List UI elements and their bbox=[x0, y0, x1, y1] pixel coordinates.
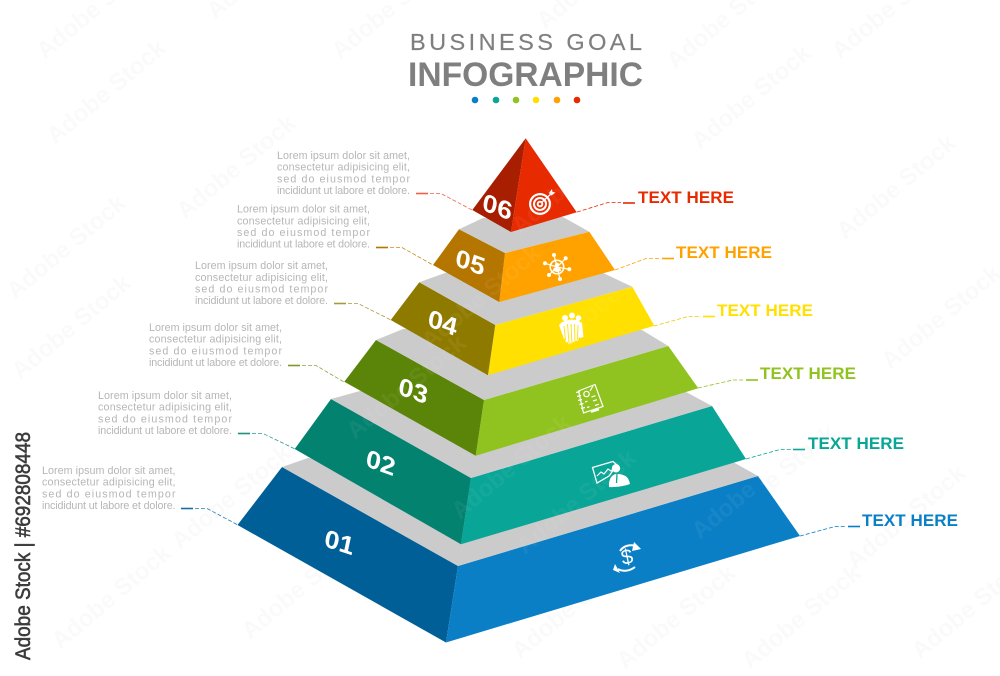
tier 01 bbox=[238, 458, 800, 642]
tier numbers bbox=[325, 187, 512, 562]
icon: dollar cycle bbox=[613, 542, 641, 573]
text block 03: Lorem ipsum dolor sit amet, bbox=[149, 322, 282, 334]
right labels: TEXT HERE bbox=[638, 188, 734, 207]
tier 05 bbox=[433, 217, 615, 302]
watermark over pyramid: Adobe Stock bbox=[552, 234, 682, 350]
text block 03: sed do eiusmod tempor bbox=[149, 345, 282, 357]
watermark over pyramid: Adobe Stock bbox=[417, 239, 547, 355]
text block 02: sed do eiusmod tempor bbox=[98, 413, 232, 425]
tier numbers: 01 bbox=[325, 523, 353, 562]
right labels: TEXT HERE bbox=[717, 301, 813, 320]
right labels: TEXT HERE bbox=[760, 364, 856, 383]
tier numbers: 04 bbox=[428, 303, 457, 343]
text block 05: incididunt ut labore et dolore. bbox=[237, 239, 370, 251]
right labels bbox=[638, 188, 958, 530]
icon: network bbox=[543, 253, 571, 281]
text block 05: Lorem ipsum dolor sit amet, bbox=[237, 204, 370, 216]
title line: infographic: INFOGRAPHIC bbox=[408, 56, 643, 94]
tier 06 bbox=[472, 138, 577, 232]
text block 03: incididunt ut labore et dolore. bbox=[149, 357, 282, 369]
tier numbers: 06 bbox=[483, 187, 512, 227]
text block 01: incididunt ut labore et dolore. bbox=[42, 500, 176, 512]
text block 04: incididunt ut labore et dolore. bbox=[195, 295, 328, 307]
text block 04: Lorem ipsum dolor sit amet, bbox=[195, 260, 328, 272]
tier 02 bbox=[295, 391, 746, 544]
text block 06: sed do eiusmod tempor bbox=[277, 173, 410, 185]
left connector lines bbox=[181, 194, 472, 525]
text block 04 bbox=[195, 260, 328, 307]
icon: team bbox=[559, 312, 584, 344]
text block 01: sed do eiusmod tempor bbox=[42, 488, 176, 500]
text block 06: Lorem ipsum dolor sit amet, bbox=[277, 150, 410, 162]
text block 05 bbox=[237, 204, 370, 251]
text block 02 bbox=[98, 390, 232, 437]
text block 02: Lorem ipsum dolor sit amet, bbox=[98, 390, 232, 402]
watermark over pyramid: Adobe Stock bbox=[507, 124, 637, 240]
tier numbers: 05 bbox=[456, 242, 485, 282]
pyramid bbox=[238, 138, 800, 643]
watermark over pyramid: Adobe Stock bbox=[342, 329, 472, 445]
right labels: TEXT HERE bbox=[808, 434, 904, 453]
watermark over pyramid: Adobe Stock bbox=[687, 429, 817, 545]
right labels: TEXT HERE bbox=[676, 243, 772, 262]
icon: dollar cycle: $ bbox=[619, 545, 636, 570]
title line: business goal: BUSINESS GOAL bbox=[410, 29, 642, 55]
watermark over pyramid: Adobe Stock bbox=[447, 409, 577, 525]
text block 01 bbox=[42, 465, 176, 512]
text block 02: consectetur adipisicing elit, bbox=[98, 402, 232, 414]
tier 04 bbox=[391, 253, 654, 375]
right labels: TEXT HERE bbox=[862, 511, 958, 530]
adobe stock side label: Adobe Stock | #692808448 bbox=[12, 432, 35, 660]
text block 04: sed do eiusmod tempor bbox=[195, 284, 328, 296]
tier 03 bbox=[344, 325, 698, 456]
watermark over pyramid bbox=[342, 124, 817, 560]
text block 01: Lorem ipsum dolor sit amet, bbox=[42, 465, 176, 477]
tier numbers: 02 bbox=[366, 443, 395, 483]
watermark over pyramid: Adobe Stock bbox=[512, 444, 642, 560]
text block 05: sed do eiusmod tempor bbox=[237, 227, 370, 239]
icon: presenter with chart bbox=[592, 462, 630, 487]
text block 05: consectetur adipisicing elit, bbox=[237, 215, 370, 227]
text block 01: consectetur adipisicing elit, bbox=[42, 477, 176, 489]
text block 03 bbox=[149, 322, 282, 369]
text block 02: incididunt ut labore et dolore. bbox=[98, 425, 232, 437]
right connector lines bbox=[577, 202, 860, 536]
title bbox=[408, 29, 643, 94]
icon: notebook bbox=[576, 384, 603, 413]
text block 06: consectetur adipisicing elit, bbox=[277, 162, 410, 174]
text block 06 bbox=[277, 150, 410, 197]
text block 03: consectetur adipisicing elit, bbox=[149, 334, 282, 346]
text block 04: consectetur adipisicing elit, bbox=[195, 272, 328, 284]
icon: target bbox=[529, 189, 556, 215]
text block 06: incididunt ut labore et dolore. bbox=[277, 185, 410, 197]
colour dots bbox=[472, 97, 580, 103]
tier numbers: 03 bbox=[399, 371, 428, 411]
